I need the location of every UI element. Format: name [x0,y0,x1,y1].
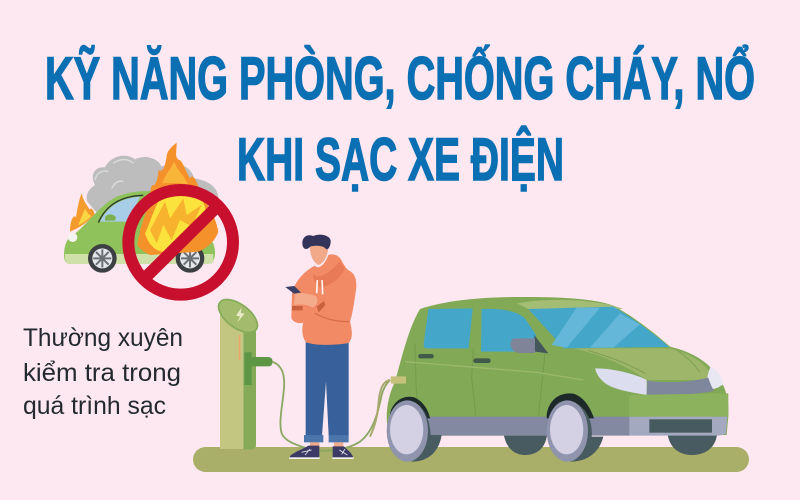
far-side wheels [503,432,547,455]
bumper skirt [427,417,630,436]
window [100,197,140,222]
head [310,242,328,265]
grille [647,378,714,395]
front side window [481,309,536,352]
hands and phone [294,293,317,308]
person [285,235,356,459]
smoke cloud [87,156,218,217]
windshield [528,307,669,348]
title [45,45,755,193]
door lines and handles [415,343,545,417]
green electric car [370,297,728,462]
hood [573,348,714,380]
jeans [306,342,349,436]
text block: caption: kiểm tra trong [23,359,181,387]
front wheel [547,400,603,462]
title: KHI SẠC XE ĐIỆN [237,126,564,193]
charging station and person [213,235,390,459]
prohibition sign [128,190,233,295]
text block: caption [23,324,183,420]
front shadow panel [629,393,728,417]
wheels [88,244,204,273]
rear wheel [387,400,442,462]
wheel arches [390,397,430,418]
ground bar [193,447,749,472]
flames [70,193,95,232]
charging port [391,376,406,384]
charging cable [272,362,390,451]
shoes [290,446,319,458]
hoodie [291,254,356,345]
car body [387,297,728,436]
headlight [68,233,77,242]
icon: burning car with prohibition sign [64,143,233,295]
side mirror [534,335,548,353]
rear window [424,308,473,348]
roof highlight [517,300,623,309]
cable to car [370,380,390,437]
car body [64,191,215,264]
charging post [213,293,273,449]
headlights [595,368,647,395]
text block: caption: Thường xuyên [23,324,183,352]
text block: caption: quá trình sạc [23,392,166,420]
hair [302,235,331,249]
